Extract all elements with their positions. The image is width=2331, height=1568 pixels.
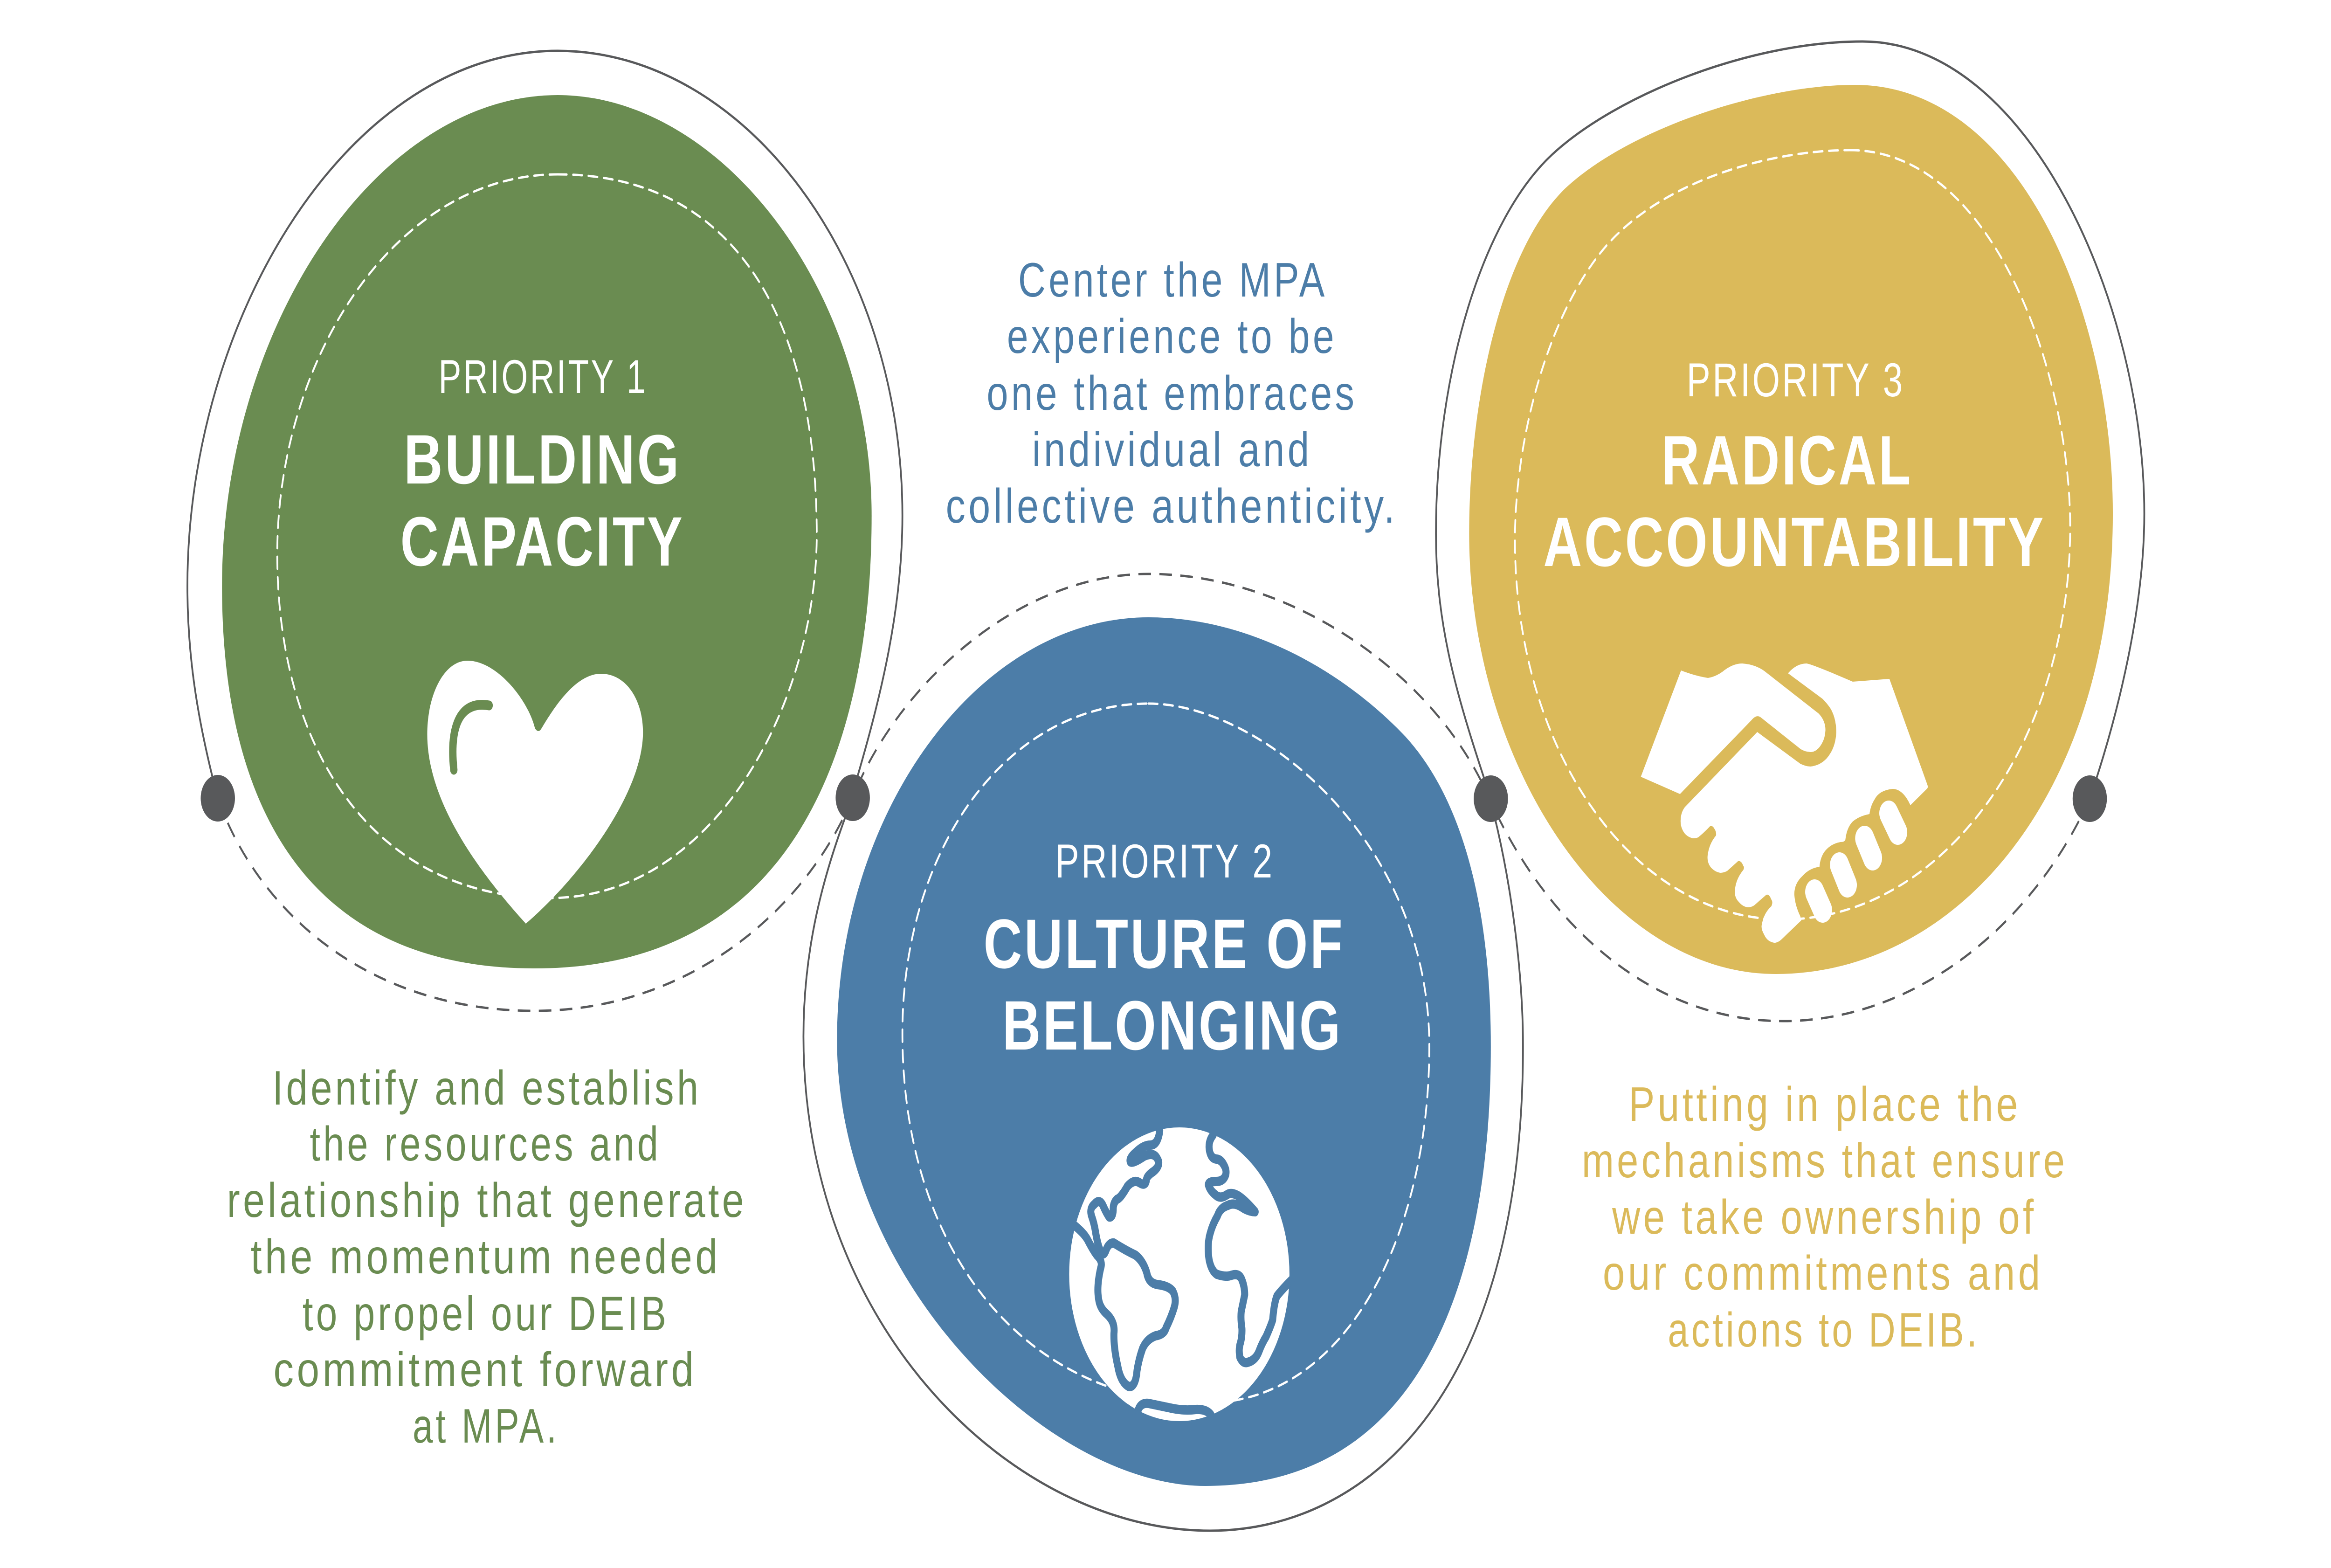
text block: priority 1 description: Identify and establish: [272, 1061, 701, 1115]
heading: radical accountability: [1543, 421, 2046, 581]
panel: priority 1 building capacity: [222, 95, 872, 968]
text block: priority 3 description: Putting in place the: [1628, 1078, 2021, 1132]
heading: culture of belonging: CULTURE OF: [984, 905, 1345, 983]
heading: radical accountability: ACCOUNTABILITY: [1543, 503, 2046, 581]
text block: priority 3 description: our commitments and: [1603, 1246, 2043, 1300]
text block: priority 3 description: we take ownership of: [1612, 1190, 2037, 1244]
text block: priority 1 description: at MPA.: [413, 1399, 559, 1453]
heading: radical accountability: RADICAL: [1662, 421, 1913, 500]
text block: priority 3 description: [1582, 1078, 2068, 1357]
icon: heart: [427, 661, 643, 924]
yellow blob: [1469, 85, 2113, 974]
inner dashed ring: [277, 174, 817, 898]
text block: priority 2 description: Center the MPA: [1018, 253, 1328, 307]
text block: priority 1 description: the momentum needed: [251, 1230, 721, 1284]
heading: priority 2: PRIORITY 2: [1055, 835, 1275, 888]
dashed connector outline: [218, 574, 2090, 1021]
solid connector outline: [187, 41, 2145, 1531]
text block: priority 3 description: actions to DEIB.: [1668, 1303, 1980, 1357]
heading: culture of belonging: BELONGING: [1002, 987, 1343, 1065]
text block: priority 3 description: mechanisms that ensure: [1582, 1134, 2068, 1188]
text block: priority 2 description: individual and: [1032, 423, 1312, 477]
heading: culture of belonging: [984, 905, 1345, 1065]
panel: priority 3 radical accountability: [1469, 85, 2113, 974]
green blob: [222, 95, 872, 968]
text block: priority 2 description: collective authenticity.: [946, 479, 1398, 533]
text block: priority 1 description: commitment forward: [273, 1343, 697, 1397]
icon: handshake: [1641, 663, 1928, 943]
text block: priority 2 description: one that embraces: [986, 366, 1357, 421]
inner dashed ring: [1515, 150, 2070, 919]
text block: priority 1 description: to propel our DEIB: [303, 1287, 669, 1341]
inner dashed ring: [903, 704, 1429, 1403]
text block: priority 1 description: relationship that generate: [227, 1174, 747, 1228]
heading: building capacity: BUILDING: [404, 421, 681, 499]
blue blob: [837, 617, 1491, 1486]
text block: priority 1 description: the resources and: [310, 1117, 661, 1171]
text block: priority 1 description: [227, 1061, 747, 1453]
heading: building capacity: [400, 421, 684, 581]
text block: priority 2 description: [946, 253, 1398, 533]
icon: globe: [1069, 1127, 1291, 1421]
heading: building capacity: CAPACITY: [400, 503, 684, 581]
panel: priority 2 culture of belonging: [837, 617, 1491, 1486]
connector dots: [200, 774, 2107, 822]
heading: priority 1: PRIORITY 1: [438, 350, 648, 404]
text block: priority 2 description: experience to be: [1007, 310, 1337, 364]
heading: priority 3: PRIORITY 3: [1687, 353, 1905, 407]
